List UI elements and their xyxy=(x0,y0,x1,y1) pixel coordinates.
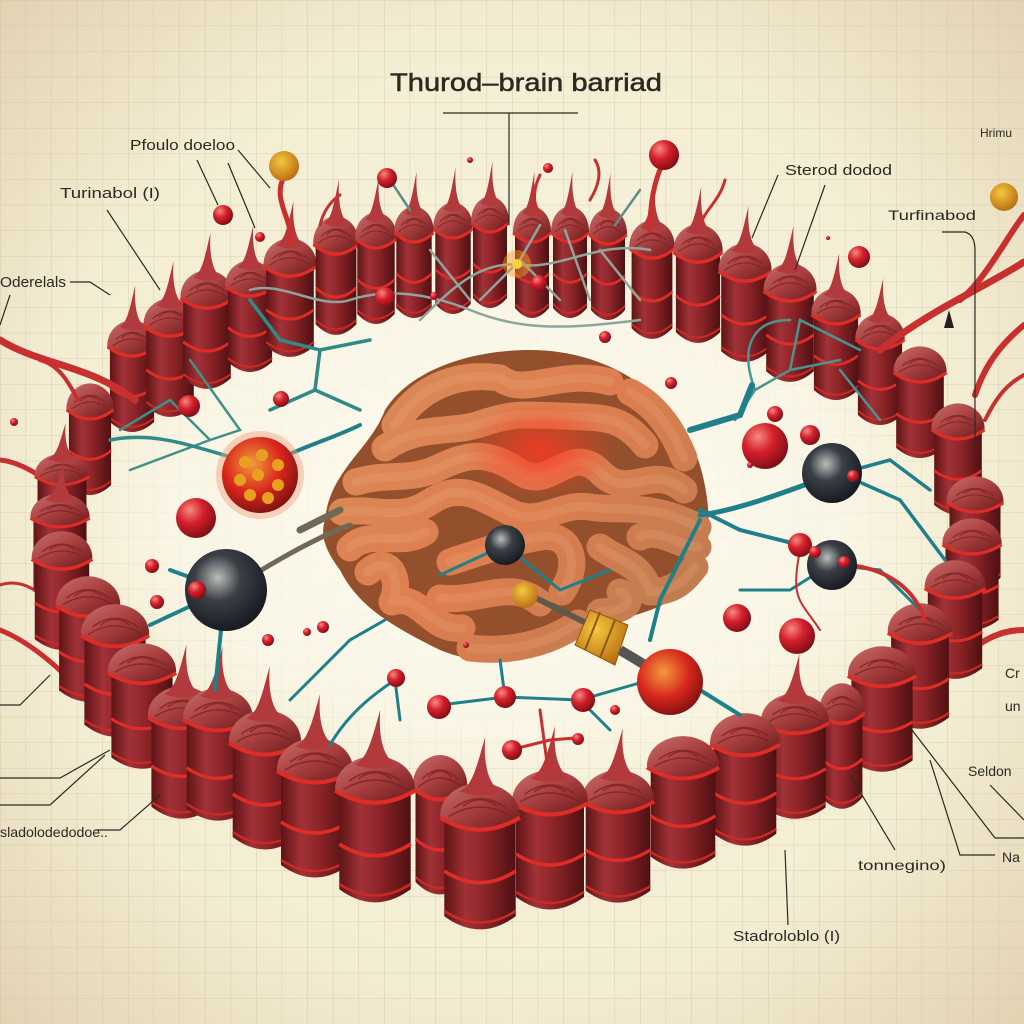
large signal spheres xyxy=(176,140,1018,715)
blood vessels xyxy=(0,160,1024,680)
label: Na: Na xyxy=(1002,849,1020,865)
spark xyxy=(503,250,531,278)
front ring of barrier cells xyxy=(30,423,1002,929)
neural network: upper branches xyxy=(110,180,880,470)
label: sladolodedodoe: sladolodedodoe.. xyxy=(0,824,108,840)
label: Pfoulo doeloo: Pfoulo doeloo xyxy=(130,137,235,154)
central glow xyxy=(70,230,950,790)
brain xyxy=(323,350,709,660)
label: Cr un: un xyxy=(1005,698,1021,714)
small arrow xyxy=(944,310,954,328)
title leader line xyxy=(443,113,578,225)
label: Oderelals: Oderelals xyxy=(0,274,66,291)
leader lines xyxy=(0,150,1024,925)
label: Stadroloblo: Stadroloblo (I) xyxy=(733,928,840,945)
title: Thurod–brain barriad xyxy=(390,69,662,97)
back row of barrier cells xyxy=(66,161,1004,588)
label: Cr un: Cr xyxy=(1005,665,1020,681)
label: Turfinabod: Turfinabod xyxy=(888,207,976,223)
label: tonnegino: tonnegino) xyxy=(858,857,946,873)
label: Turinabol: Turinabol (I) xyxy=(60,185,160,202)
label: Hrimu: Hrimu xyxy=(980,126,1012,140)
small red nodes xyxy=(10,157,870,760)
label: Sterod dodod: Sterod dodod xyxy=(785,162,892,179)
gold connector xyxy=(485,525,645,665)
label: Seldon: Seldon xyxy=(968,763,1012,779)
teal axons over brain xyxy=(150,425,945,770)
